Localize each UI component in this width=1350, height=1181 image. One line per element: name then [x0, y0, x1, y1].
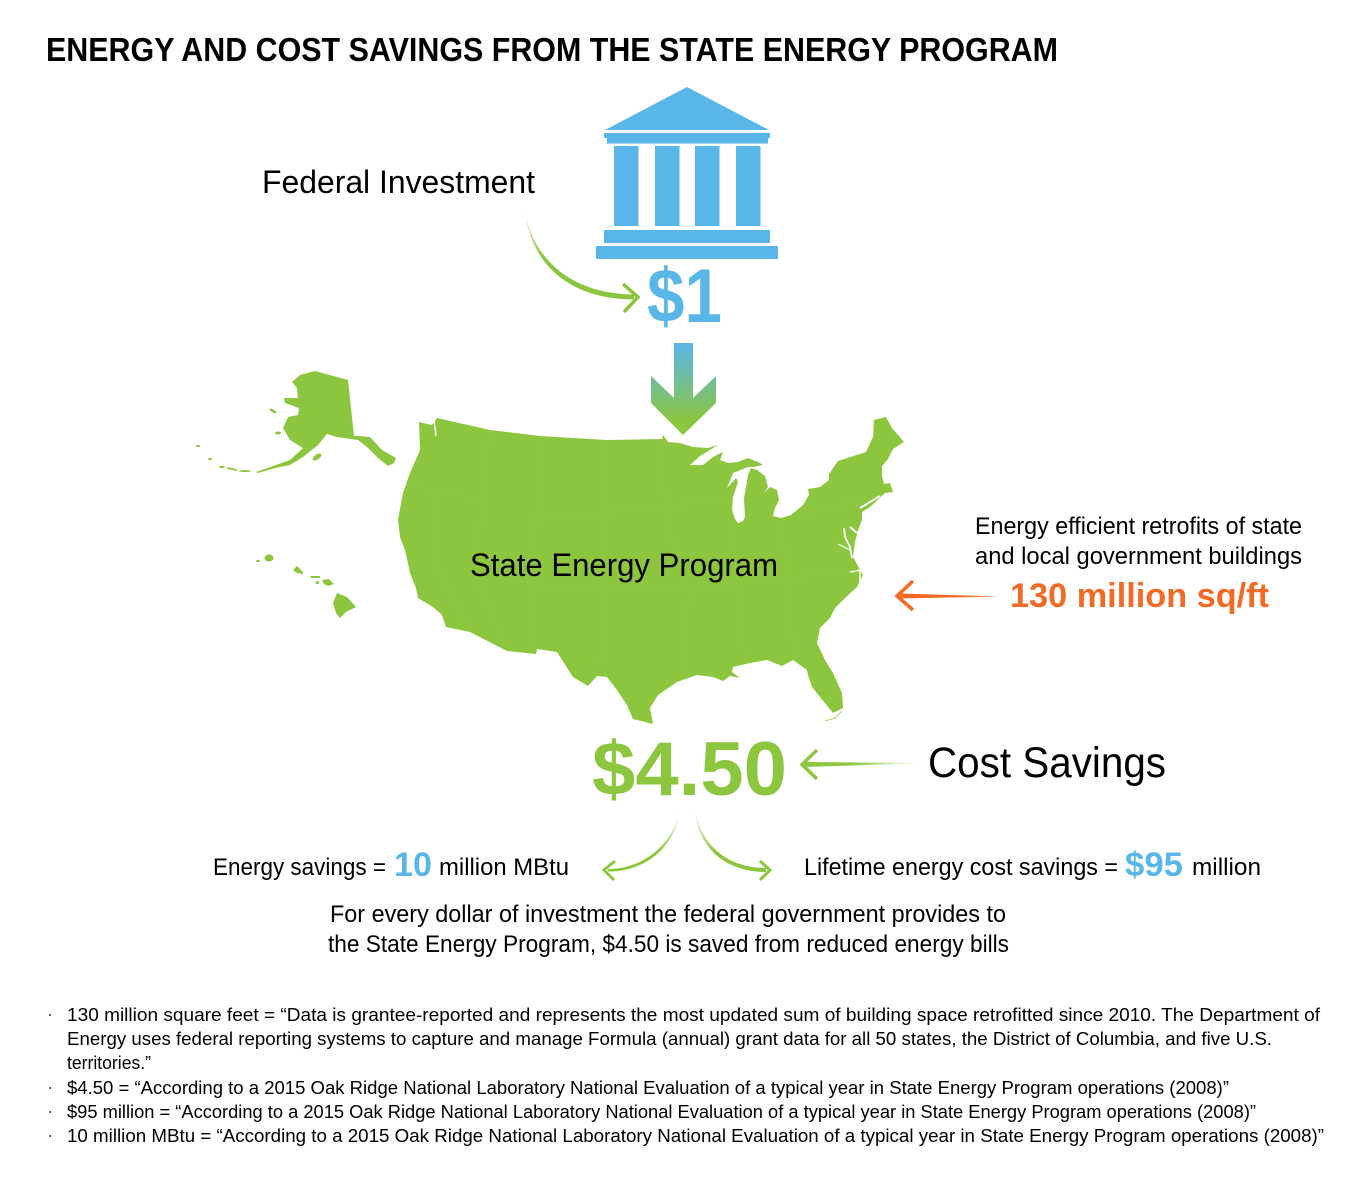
text: summary: the State Energy Program, $4.50 is saved from reduced energy bills: [328, 931, 1009, 958]
footnotes: [49, 1004, 1324, 1146]
footnotes: Energy uses federal reporting systems to capture and manage Formula (annual) grant data for all 50 states, the District of Columbia, and five U.S.: [67, 1028, 1272, 1049]
footnotes: $4.50 = “According to a 2015 Oak Ridge National Laboratory National Evaluation of a typical year in State Energy Program operations (2008)”: [67, 1077, 1229, 1098]
value: one dollar: $1: [647, 254, 722, 339]
map: Alaska: [196, 371, 396, 473]
title: ENERGY AND COST SAVINGS FROM THE STATE ENERGY PROGRAM: [46, 31, 1058, 68]
arrow: blue to green down arrow: [651, 343, 716, 435]
label: cost savings: Cost Savings: [928, 739, 1166, 787]
footnotes: territories.”: [67, 1052, 151, 1073]
icon: government building: [596, 87, 778, 259]
text: energy savings: million MBtu: [439, 854, 569, 881]
text: lifetime cost savings: Lifetime energy cost savings =: [804, 854, 1118, 881]
value: 130 million sq/ft: 130 million sq/ft: [1010, 577, 1269, 615]
map: Florida Keys: [825, 711, 842, 721]
value: four fifty dollars: $4.50: [592, 727, 787, 812]
arrow: federal investment to one dollar: [524, 207, 638, 312]
footnotes: 10 million MBtu = “According to a 2015 Oak Ridge National Laboratory National Evaluation of a typical year in State Energy Program operations (2008)”: [67, 1125, 1324, 1146]
text: energy savings: [213, 846, 569, 884]
map: bays and sounds: [434, 420, 880, 583]
arrow: split left: [604, 810, 680, 880]
text: energy savings: 10: [394, 846, 432, 884]
text: energy savings: Energy savings =: [213, 854, 386, 881]
footnotes: $95 million = “According to a 2015 Oak Ridge National Laboratory National Evaluation of a typical year in State Energy Program operations (2008)”: [67, 1101, 1256, 1122]
text: lifetime cost savings: [804, 846, 1261, 884]
map: Hawaii: [256, 554, 356, 618]
footnotes: 130 million square feet = “Data is grantee-reported and represents the most updated sum of building space retrofitted since 2010. The Department of: [67, 1004, 1321, 1025]
text: retrofits description: [975, 513, 1302, 570]
text: retrofits description: and local government buildings: [975, 543, 1302, 570]
arrow: cost savings: [802, 750, 927, 779]
text: summary: For every dollar of investment the federal government provides to: [330, 901, 1006, 928]
label: state energy program: State Energy Program: [470, 547, 778, 583]
arrow: split right: [695, 810, 770, 880]
text: retrofits description: Energy efficient retrofits of state: [975, 513, 1302, 540]
text: lifetime cost savings: $95: [1125, 846, 1183, 884]
map: contiguous states: [398, 417, 904, 724]
text: lifetime cost savings: million: [1192, 854, 1261, 881]
arrow: orange: [897, 581, 1000, 610]
text: summary: [328, 901, 1009, 958]
label: federal investment: Federal Investment: [262, 164, 535, 200]
map: United States: [196, 371, 904, 724]
map: faint state lines: [403, 430, 860, 675]
